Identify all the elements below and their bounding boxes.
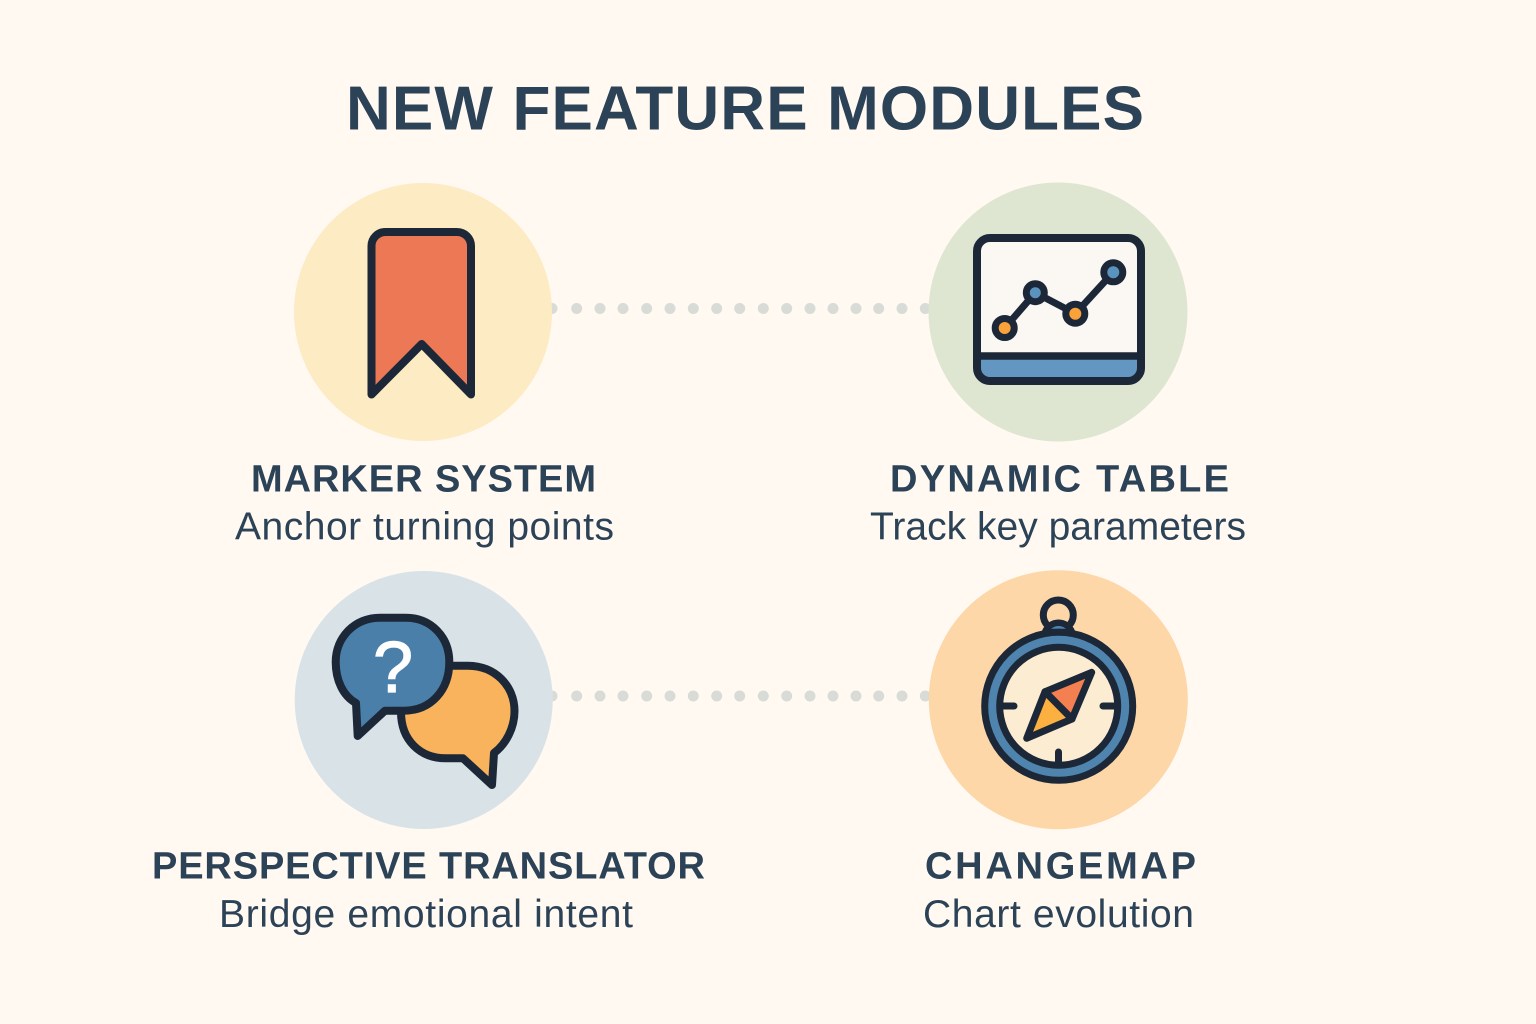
icon: bookmark bbox=[372, 232, 471, 394]
title: NEW FEATURE MODULES bbox=[346, 74, 1144, 144]
icon background: green circle bbox=[928, 182, 1188, 442]
icon background: orange circle bbox=[929, 570, 1188, 829]
panel: changemap bbox=[923, 570, 1196, 936]
description: changemap: Chart evolution bbox=[923, 893, 1194, 936]
icon background: yellow circle bbox=[294, 183, 552, 441]
icon: compass bbox=[985, 600, 1133, 780]
icon background: blue-grey circle bbox=[295, 571, 553, 829]
heading: changemap: CHANGEMAP bbox=[925, 846, 1196, 888]
connector: top dotted line bbox=[546, 303, 931, 314]
description: perspective translator: Bridge emotional intent bbox=[219, 893, 633, 936]
panel: perspective translator bbox=[152, 571, 705, 936]
heading: dynamic table: DYNAMIC TABLE bbox=[890, 458, 1229, 500]
panel: marker system bbox=[235, 183, 614, 548]
icon: speech bubbles: ? bbox=[373, 628, 413, 708]
heading: marker system: MARKER SYSTEM bbox=[251, 458, 596, 500]
icon: line chart screen bbox=[977, 238, 1141, 381]
heading: perspective translator: PERSPECTIVE TRANSLATOR bbox=[152, 846, 705, 888]
connector: bottom dotted line bbox=[546, 690, 931, 702]
panel: dynamic table bbox=[870, 182, 1246, 548]
description: marker system: Anchor turning points bbox=[235, 506, 614, 548]
icon: speech bubbles bbox=[336, 618, 514, 785]
description: dynamic table: Track key parameters bbox=[870, 506, 1246, 548]
